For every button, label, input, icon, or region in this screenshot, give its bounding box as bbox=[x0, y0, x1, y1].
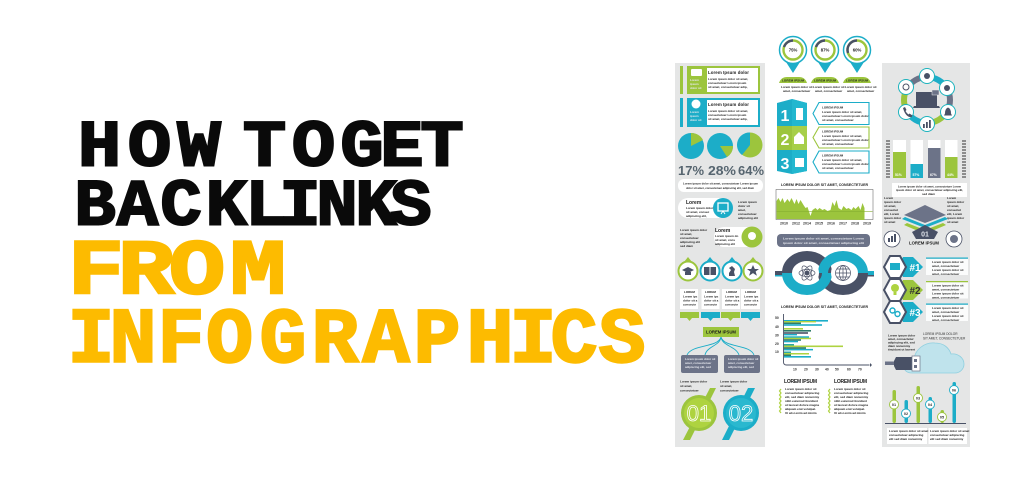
arrow callouts: consectetuer Lorem ipsum dolor bbox=[822, 162, 870, 166]
lollipop captions: consectetuer adipiscing bbox=[889, 433, 924, 437]
column chart: 57% bbox=[912, 173, 919, 177]
title line: from: FROM bbox=[68, 228, 286, 317]
lollipop chart bbox=[885, 382, 966, 424]
hex row 2 bbox=[884, 279, 968, 301]
four text cards: dolor sit a bbox=[704, 298, 719, 302]
banner: blue: sit amet, consectetuer adip, bbox=[708, 117, 748, 121]
layers side text: sit amet, bbox=[947, 204, 959, 208]
four text cards: LOREM bbox=[684, 290, 695, 294]
hex row 3 bbox=[884, 301, 968, 323]
callout: idea: sed diam bbox=[680, 244, 693, 248]
drop icons row bbox=[678, 257, 762, 280]
column chart: 67% bbox=[930, 173, 937, 177]
callout: idea: Lorem bbox=[715, 228, 731, 234]
text column: right: LOREM IPSUM bbox=[834, 379, 867, 385]
title line: infographics: INFOGRAPHICS bbox=[68, 298, 645, 386]
banner: green: Lorem bbox=[690, 78, 699, 82]
lollipop captions: Lorem ipsum dolor sit amet bbox=[930, 429, 969, 433]
text column: right: consectetuer adipiscing bbox=[834, 391, 869, 395]
area chart years bbox=[780, 222, 871, 226]
hex row 1: #1 bbox=[909, 263, 921, 274]
four text cards: LOREM bbox=[705, 290, 716, 294]
pin captions: Lorem ipsum dolor sit bbox=[781, 85, 813, 89]
text column: right: Ut wisi enim ad minim bbox=[834, 411, 866, 415]
banner: blue: Lorem ipsum dolor sit amet, bbox=[708, 109, 748, 113]
badge 02 bbox=[722, 388, 759, 440]
hex row 2: #2 bbox=[909, 286, 921, 297]
layers side text: sit amet, bbox=[884, 204, 896, 208]
cloud text: tincidunt ut laoreet bbox=[888, 348, 915, 352]
badge text: Lorem ipsum dolor bbox=[720, 380, 748, 384]
numbered cubes bbox=[777, 99, 807, 174]
horizontal bar chart: 20 bbox=[775, 342, 779, 346]
text column: left: Ut wisi enim ad minim bbox=[785, 411, 817, 415]
banner: blue bbox=[680, 98, 760, 127]
horizontal bar chart: 40 bbox=[775, 325, 779, 329]
horizontal bar chart: 10 bbox=[793, 368, 797, 372]
hex row 2: amet, consectetuer bbox=[932, 288, 960, 292]
layers side text bbox=[884, 196, 965, 224]
area chart years: 2015 bbox=[815, 222, 823, 226]
hex row 3: Lorem ipsum dolor sit bbox=[932, 306, 964, 310]
text column: left: nibh euismod tincidunt bbox=[785, 399, 818, 403]
layers side text: sit amet bbox=[947, 220, 958, 224]
callout: presentation: consectetuer bbox=[738, 212, 758, 216]
gauge pins: 87% bbox=[821, 48, 829, 52]
cloud text: amet, consectetur bbox=[888, 337, 915, 341]
gauge pins: 75% bbox=[789, 48, 797, 52]
banner: blue: Lorem bbox=[690, 110, 699, 114]
numbered cubes: 2 bbox=[781, 132, 790, 149]
pie chart: 17% bbox=[678, 133, 704, 159]
pin captions: LOREM IPSUM bbox=[782, 78, 804, 82]
text column: left: consectetuer adipiscing bbox=[785, 391, 820, 395]
lollipop chart: 01 bbox=[892, 403, 896, 407]
cloud text: SIT AMET, CONSECTETUER bbox=[923, 336, 966, 340]
layers side text: Lorem bbox=[884, 196, 894, 200]
banner: green bbox=[680, 66, 760, 94]
badge 01 bbox=[681, 388, 717, 440]
caption bar: Lorem ipsum dolor sit amet, consectetuer Lorem bbox=[783, 236, 865, 240]
title bbox=[68, 110, 645, 385]
badge 01: 01 bbox=[687, 401, 711, 426]
banner: green: ipsum bbox=[690, 82, 699, 86]
area chart years: 2019 bbox=[863, 222, 871, 226]
caption pill: Lorem ipsum dolor sit amet, consectetuer Lorem ipsum bbox=[683, 182, 758, 186]
four text cards: LOREM bbox=[745, 290, 756, 294]
arrow callouts: LOREM IPSUM bbox=[822, 106, 844, 110]
pie chart: 64% bbox=[737, 132, 762, 158]
callout: presentation: amet, bbox=[738, 208, 746, 212]
badge text: sit amet, bbox=[720, 384, 732, 388]
flow diagram: amet, consectetuer bbox=[728, 361, 755, 365]
callout: idea: Lorem ipsum dolor bbox=[680, 228, 708, 232]
text column: left: LOREM IPSUM bbox=[784, 379, 817, 385]
horizontal bar chart: 60 bbox=[847, 368, 851, 372]
title line: how to get: HOW TO GET bbox=[78, 110, 464, 185]
percentages: 64% bbox=[738, 164, 764, 178]
cloud text: Lorem ipsum dolor bbox=[888, 334, 916, 338]
callout: idea: sit amet, bbox=[680, 232, 692, 236]
layers side text: ipsum dolor bbox=[947, 216, 965, 220]
white caption: sed diam bbox=[922, 192, 935, 196]
badge text: consectetuer bbox=[680, 388, 700, 392]
banner: green: dolor sit bbox=[690, 86, 701, 90]
hex row 2: amet, consectetuer bbox=[932, 296, 960, 300]
banner: blue: dolor sit bbox=[690, 118, 701, 122]
text column: right: nibh euismod tincidunt bbox=[834, 399, 867, 403]
lollipop captions bbox=[887, 428, 969, 444]
caption pill bbox=[678, 179, 763, 192]
panel: left column bbox=[675, 63, 765, 447]
callout: presentation: Lorem ipsum bbox=[738, 200, 757, 204]
area chart years: 2016 bbox=[827, 222, 835, 226]
text column: right: aliquam erat volutpat. bbox=[834, 407, 865, 411]
area chart years: 2018 bbox=[851, 222, 859, 226]
pin captions bbox=[779, 77, 877, 93]
banner: blue: consectetuer Lorem ipsum bbox=[708, 113, 747, 117]
layers side text: ipsum dolor bbox=[947, 200, 965, 204]
four text cards: Lorem ips bbox=[683, 294, 698, 298]
area chart heading: LOREM IPSUM DOLOR SIT AMET, CONSECTETUER bbox=[781, 183, 868, 187]
banner: green: Lorem ipsum dolor sit amet, bbox=[708, 77, 748, 81]
arrow callouts: Lorem ipsum dolor sit amet, bbox=[822, 158, 862, 162]
pie chart: 28% bbox=[707, 133, 733, 159]
callout: presentation: adipiscing elit, bbox=[686, 214, 707, 218]
stacked layers bbox=[902, 205, 948, 239]
horizontal bar chart: 30 bbox=[775, 334, 779, 338]
callout: presentation: sit amet, consec bbox=[686, 210, 710, 214]
callout: idea bbox=[680, 226, 762, 248]
banner: blue: ipsum bbox=[690, 114, 699, 118]
percentages: 28% bbox=[708, 164, 736, 178]
horizontal bar chart bbox=[775, 314, 872, 372]
lollipop chart: 06 bbox=[952, 388, 956, 392]
cloud text: adipiscing elit, sed bbox=[888, 340, 915, 344]
four text cards bbox=[680, 289, 760, 309]
four text cards: dolor sit a bbox=[683, 298, 698, 302]
pin captions: amet, consectetuer bbox=[783, 89, 811, 93]
badge 02: 02 bbox=[729, 401, 753, 426]
four text cards: consecte bbox=[744, 302, 757, 306]
callout: idea: Lorem ipsum do bbox=[715, 234, 739, 238]
linked rings diagram bbox=[775, 256, 874, 290]
horizontal bar chart: 10 bbox=[775, 350, 779, 354]
area chart years: 2014 bbox=[803, 222, 811, 226]
layers side text: consectet bbox=[947, 208, 961, 212]
caption bar bbox=[777, 234, 870, 247]
callout: presentation: adipiscing elit bbox=[738, 216, 758, 220]
colour tabs bbox=[680, 312, 760, 321]
text column: right: ut laoreet dolore magna bbox=[834, 403, 868, 407]
badge text: sit amet, bbox=[680, 384, 692, 388]
horizontal bar chart: 30 bbox=[815, 368, 819, 372]
gauge pins bbox=[780, 36, 870, 73]
white caption: ipsum dolor sit amet, consectetuer adipiscing elit, bbox=[896, 188, 963, 192]
area chart years: 2010 bbox=[780, 222, 788, 226]
arrow callouts: Lorem ipsum dolor sit amet, bbox=[822, 110, 862, 114]
flow diagram: adipiscing elit, sed bbox=[728, 365, 754, 369]
hex row 1: Lorem ipsum dolor sit bbox=[932, 260, 964, 264]
lollipop captions: elit sed diam nonummy bbox=[889, 437, 923, 441]
arrow callouts: LOREM IPSUM bbox=[822, 154, 844, 158]
flow diagram: adipiscing elit, sed bbox=[685, 365, 711, 369]
text column: right bbox=[828, 379, 869, 415]
pin captions: LOREM IPSUM bbox=[846, 78, 868, 82]
arrow callouts: sit amet, consectetuer bbox=[822, 166, 855, 170]
banner: blue: Lorem Ipsum dolor bbox=[708, 102, 749, 107]
numbered cubes: 3 bbox=[781, 156, 790, 173]
panel: middle column bbox=[775, 36, 877, 415]
column chart: 44% bbox=[947, 173, 954, 177]
hex row 1: amet, consectetuer bbox=[932, 264, 960, 268]
hex row 2: Lorem ipsum dolor sit bbox=[932, 284, 964, 288]
cloud text: LOREM IPSUM DOLOR bbox=[923, 332, 958, 336]
hex row 1: amet, consectetuer bbox=[932, 272, 960, 276]
layers side text: ipsum dolor bbox=[884, 216, 902, 220]
panel: right column bbox=[882, 63, 970, 447]
white caption bbox=[892, 183, 967, 197]
layers icons and label: LOREM IPSUM bbox=[909, 240, 939, 246]
arrow callouts: LOREM IPSUM bbox=[822, 130, 844, 134]
numbered cubes: 1 bbox=[781, 108, 790, 125]
arrow callouts: sit amet, consectetuer bbox=[822, 142, 855, 146]
four text cards: Lorem ips bbox=[725, 294, 740, 298]
infographic collage bbox=[675, 36, 970, 447]
horizontal bar chart: 40 bbox=[825, 368, 829, 372]
flow diagram: Lorem ipsum dolor sit bbox=[685, 357, 715, 361]
banner: green: sit amet, consectetuer adip, bbox=[708, 85, 748, 89]
title line: backlinks: BACKLINKS bbox=[74, 171, 432, 245]
bar chart heading: LOREM IPSUM DOLOR SIT AMET, CONSECTETUER bbox=[781, 305, 868, 309]
hex row 2: Lorem ipsum dolor sit bbox=[932, 292, 964, 296]
text column: left bbox=[780, 379, 820, 415]
icon ring bbox=[896, 68, 958, 132]
layers side text: consectet bbox=[884, 208, 898, 212]
arrow callouts: sit amet, consectetuer bbox=[822, 118, 855, 122]
banner: green: Lorem Ipsum dolor bbox=[708, 70, 749, 75]
layers icons and label bbox=[884, 231, 962, 247]
arrow callouts: consectetuer Lorem ipsum dolor bbox=[822, 114, 870, 118]
lollipop captions: Lorem ipsum dolor sit amet bbox=[889, 429, 928, 433]
callout: idea: adipiscing elit bbox=[680, 240, 700, 244]
text column: left: elit, sed diam nonummy bbox=[785, 395, 820, 399]
lollipop chart: 02 bbox=[904, 412, 908, 416]
pin captions: LOREM IPSUM bbox=[814, 78, 836, 82]
lollipop chart: 03 bbox=[916, 396, 920, 400]
four text cards: Lorem ips bbox=[744, 294, 759, 298]
text column: right: elit, sed diam nonummy bbox=[834, 395, 869, 399]
callout: idea: adipiscing elit bbox=[715, 242, 735, 246]
hex row 3: amet, consectetuer bbox=[932, 310, 960, 314]
stacked layers: 01 bbox=[921, 232, 929, 238]
gauge pins: 60% bbox=[853, 48, 861, 52]
flow diagram: Lorem ipsum dolor sit bbox=[728, 357, 758, 361]
lollipop chart: 04 bbox=[928, 403, 933, 407]
text column: left: ut laoreet dolore magna bbox=[785, 403, 819, 407]
pin captions: amet, consectetuer bbox=[815, 89, 843, 93]
text column: left: aliquam erat volutpat. bbox=[785, 407, 816, 411]
pin captions: amet, consectetuer bbox=[847, 89, 875, 93]
column chart: 51% bbox=[895, 173, 902, 177]
arrow callouts: consectetuer Lorem ipsum dolor bbox=[822, 138, 870, 142]
horizontal bar chart: 20 bbox=[804, 368, 808, 372]
area chart years: 2012 bbox=[792, 222, 800, 226]
hex row 3: amet, consectetuer bbox=[932, 318, 960, 322]
layers side text: Lorem bbox=[947, 196, 957, 200]
callout: presentation bbox=[678, 198, 758, 220]
layers side text: elit, Lorem bbox=[947, 212, 963, 216]
horizontal bar chart: 70 bbox=[858, 368, 862, 372]
layers side text: elit, Lorem bbox=[884, 212, 900, 216]
cloud text bbox=[888, 332, 966, 352]
horizontal bar chart: 50 bbox=[835, 368, 839, 372]
layers side text: ipsum dolor bbox=[884, 200, 902, 204]
badge text: Lorem ipsum dolor bbox=[680, 380, 708, 384]
arrow callouts: Lorem ipsum dolor sit amet, bbox=[822, 134, 862, 138]
four text cards: Lorem ips bbox=[704, 294, 719, 298]
badge text bbox=[680, 380, 748, 392]
flow diagram: amet, consectetuer bbox=[685, 361, 712, 365]
callout: presentation: dolor sit bbox=[738, 204, 750, 208]
hex row 1 bbox=[884, 256, 968, 278]
callout: presentation: Lorem bbox=[686, 200, 702, 206]
text column: right: Lorem ipsum dolor sit bbox=[834, 387, 866, 391]
column chart bbox=[886, 140, 966, 178]
callout: idea: consectetuer bbox=[680, 236, 700, 240]
four text cards: LOREM bbox=[726, 290, 737, 294]
laptop bbox=[913, 90, 940, 108]
lollipop chart: 05 bbox=[940, 416, 944, 420]
hex row 1: Lorem ipsum dolor sit bbox=[932, 268, 964, 272]
caption bar: ipsum dolor sit amet, consectetuer adipiscing elit bbox=[783, 241, 864, 245]
caption pill: dolor sit amet, consectetuer adipiscing elit, sed diam bbox=[686, 186, 754, 190]
lollipop captions: consectetuer adipiscing bbox=[930, 433, 965, 437]
cloud text: diam nonummy bbox=[888, 344, 911, 348]
four text cards: consecte bbox=[683, 302, 696, 306]
area chart years: 2017 bbox=[839, 222, 847, 226]
hex row 3: #3 bbox=[909, 308, 921, 319]
area chart bbox=[776, 190, 873, 220]
four text cards: dolor sit a bbox=[725, 298, 740, 302]
pin captions: Lorem ipsum dolor sit bbox=[845, 85, 877, 89]
pin captions: Lorem ipsum dolor sit bbox=[813, 85, 845, 89]
banner: green: consectetuer Lorem ipsum bbox=[708, 81, 747, 85]
four text cards: consecte bbox=[725, 302, 738, 306]
badge text: consectetuer bbox=[720, 388, 740, 392]
percentages bbox=[678, 164, 764, 178]
cloud and usb bbox=[885, 343, 964, 373]
white caption: Lorem ipsum dolor sit amet, consectetuer Lorem bbox=[898, 184, 961, 188]
callout: presentation: Lorem ipsum dolor bbox=[686, 206, 714, 210]
text column: left: Lorem ipsum dolor sit bbox=[785, 387, 817, 391]
horizontal bar chart: 50 bbox=[775, 316, 779, 320]
percentages: 17% bbox=[678, 164, 704, 178]
callout: idea: sit amet, cons bbox=[715, 238, 735, 242]
four text cards: dolor sit a bbox=[744, 298, 759, 302]
lollipop captions: elit sed diam nonummy bbox=[930, 437, 964, 441]
four text cards: consecte bbox=[704, 302, 717, 306]
layers side text: sit amet bbox=[884, 220, 895, 224]
flow diagram bbox=[681, 327, 760, 373]
flow diagram: LOREM IPSUM bbox=[706, 330, 736, 334]
hex row 3: Lorem ipsum dolor sit bbox=[932, 314, 964, 318]
arrow callouts bbox=[813, 102, 870, 173]
